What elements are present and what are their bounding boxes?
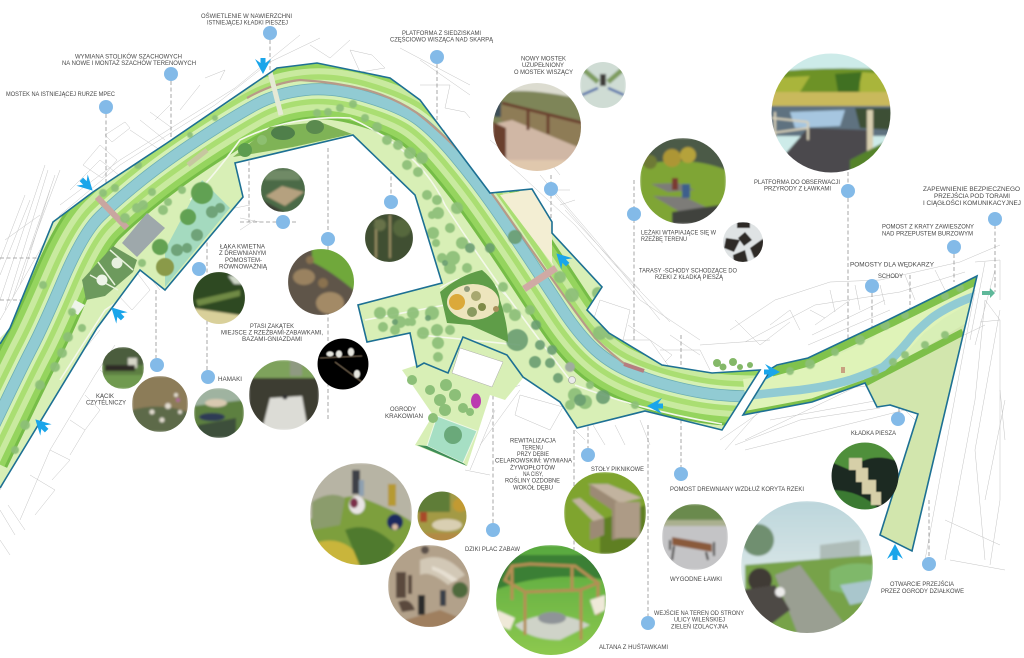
label: flower meadow bbox=[219, 244, 268, 270]
label: flower meadow: POMOSTEM- bbox=[225, 257, 262, 264]
photo: wild playground hill bbox=[310, 463, 412, 566]
label: observation platform bbox=[754, 179, 840, 192]
label: lighting bbox=[201, 11, 292, 26]
label: gazebo: ALTANA Z HUŚTAWKAMI bbox=[599, 642, 668, 651]
site area base bbox=[0, 64, 976, 550]
label: oak revitalisation: ŻYWOPŁOTÓW bbox=[510, 462, 556, 471]
photo: wicker nest bbox=[249, 360, 319, 430]
label: bird corner: PTASI ZAKĄTEK bbox=[250, 323, 295, 330]
label: reading corner: CZYTELNICZY bbox=[86, 400, 127, 406]
white paths bbox=[60, 118, 722, 424]
label: reading corner: KĄCIK bbox=[96, 393, 115, 400]
label: flower meadow: Z DREWNIANYM bbox=[219, 250, 266, 257]
label: oak revitalisation: PRZY DĘBIE bbox=[517, 451, 549, 458]
label: safe crossing bbox=[923, 186, 1021, 207]
photo: riverside visualisation bbox=[741, 501, 873, 640]
label: safe crossing: ZAPEWNIENIE BEZPIECZNEGO bbox=[923, 186, 1020, 193]
label: oak revitalisation: NA CISY, bbox=[523, 471, 543, 478]
label: chess tables: WYMIANA STOLIKÓW SZACHOWYCH bbox=[75, 52, 182, 60]
label: new footbridge: NOWY MOSTEK bbox=[521, 56, 567, 63]
small trees outside site bbox=[713, 358, 753, 370]
krakowian gardens bbox=[402, 337, 523, 466]
label: lighting: OŚWIETLENIE W NAWIERZCHNI bbox=[201, 11, 292, 20]
photo: wooden bridge bbox=[493, 83, 581, 171]
label: hammocks: HAMAKI bbox=[218, 376, 242, 383]
icon: pink oak bbox=[471, 394, 481, 408]
label: bird corner: BAZAMI-GNIAZDAMI bbox=[242, 336, 302, 343]
fountain ring bbox=[568, 376, 576, 384]
photo: forest trees bbox=[364, 213, 414, 263]
label: seating platform: PLATFORMA Z SIEDZISKAMI bbox=[402, 30, 481, 37]
label: oak revitalisation: REWITALIZACJA bbox=[510, 438, 557, 445]
label: MPEC footbridge: MOSTEK NA ISTNIEJĄCEJ RURZE MPEC bbox=[6, 91, 115, 98]
photo: hammocks bbox=[194, 388, 244, 438]
photo: wicker ducks bbox=[287, 248, 356, 316]
label: oak revitalisation: WOKÓŁ DĘBU bbox=[513, 482, 553, 491]
light green park fill bbox=[0, 119, 970, 486]
bridges bbox=[97, 197, 127, 228]
label: krakowian gardens: OGRODY bbox=[390, 406, 417, 413]
label: sunbeds: RZEŹBĘ TERENU bbox=[641, 234, 687, 243]
label: bird corner: MIEJSCE Z RZEŹBAMI-ZABAWKAMI, bbox=[221, 328, 323, 336]
label: observation platform: PRZYRODY Z ŁAWKAMI bbox=[764, 186, 831, 192]
wooden walkway along river bbox=[247, 80, 629, 367]
label: reading corner bbox=[86, 393, 127, 406]
label: krakowian gardens: KRAKOWIAN bbox=[385, 413, 423, 420]
label: terraces: TARASY -SCHODY SCHODZĄCE DO bbox=[639, 268, 737, 275]
label: oak revitalisation bbox=[495, 438, 573, 491]
label: stairs: SCHODY bbox=[878, 273, 904, 280]
label: observation platform: PLATFORMA DO OBSERWACJI bbox=[754, 179, 840, 186]
green river banks bbox=[0, 80, 775, 455]
photo: swing gazebo bbox=[495, 545, 607, 657]
label: allotment passage bbox=[881, 579, 965, 595]
photo: reading corner bbox=[102, 347, 144, 389]
label: wooden pier: POMOST DREWNIANY WZDŁUŻ KORYTA RZEKI bbox=[670, 484, 804, 493]
photo: stepping stones bbox=[831, 442, 899, 510]
label: oak revitalisation: ROŚLINY OZDOBNE bbox=[505, 476, 561, 485]
photo: observation platform bbox=[770, 52, 892, 175]
photo: comfortable bench bbox=[662, 504, 728, 570]
lower-left activity area bbox=[70, 246, 137, 315]
cream patch bbox=[500, 189, 555, 268]
label: terraces bbox=[639, 268, 737, 281]
label: grate pier bbox=[882, 224, 975, 238]
photo: river terrace steps bbox=[723, 222, 763, 262]
label: seating platform: CZĘŚCIOWO WISZĄCA NAD SKARPĄ bbox=[390, 34, 494, 44]
label: lighting: ISTNIEJĄCEJ KŁADKI PIESZEJ bbox=[207, 20, 288, 26]
label: safe crossing: PRZEJŚCIA POD TORAMI bbox=[934, 191, 1010, 200]
eastern river bank strips bbox=[743, 280, 977, 415]
label: benches: WYGODNE ŁAWKI bbox=[670, 576, 722, 583]
photo: flower meadow boardwalk bbox=[192, 271, 246, 326]
label: new footbridge: UZUPEŁNIONY bbox=[522, 62, 565, 69]
label: bird corner bbox=[221, 323, 323, 343]
label: chess tables bbox=[62, 52, 196, 67]
cadastral base map lines bbox=[0, 35, 1005, 570]
label: footbridge: KŁADKA PIESZA bbox=[851, 430, 897, 437]
photo: flowering grasses bbox=[132, 376, 188, 432]
label: grate pier: NAD PRZEPUSTEM BURZOWYM bbox=[882, 230, 973, 238]
label: new footbridge: O MOSTEK WISZĄCY bbox=[514, 69, 574, 76]
label: entrance: ZIELEŃ IZOLACYJNA bbox=[671, 622, 729, 630]
label: flower meadow: RÓWNOWAŻNIĄ bbox=[219, 262, 268, 270]
label: entrance: ULICY WILEŃSKIEJ bbox=[674, 614, 725, 624]
label: allotment passage: PRZEZ OGRODY DZIAŁKOWE bbox=[881, 588, 965, 595]
photo: suspension footbridge bbox=[580, 60, 626, 110]
label: oak revitalisation: TERENU bbox=[522, 444, 543, 451]
label: entrance bbox=[654, 608, 745, 630]
label: picnic tables: STOŁY PIKNIKOWE bbox=[591, 466, 645, 473]
dark garden strip bbox=[233, 120, 352, 157]
label: sunbeds: LEŻAKI WTAPIAJĄCE SIĘ W bbox=[641, 228, 717, 236]
project boundary bbox=[0, 63, 977, 551]
label: allotment passage: OTWARCIE PRZEJŚCIA bbox=[890, 579, 955, 588]
label: flower meadow: ŁĄKA KWIETNA bbox=[220, 244, 266, 250]
label: sunbeds bbox=[641, 228, 717, 243]
label: krakowian gardens bbox=[385, 406, 423, 420]
label: seating platform bbox=[390, 30, 494, 44]
photo: sunbeds in terrain bbox=[640, 138, 726, 224]
label: entrance: WEJŚCIE NA TEREN OD STRONY bbox=[654, 608, 745, 617]
label: chess tables: NA NOWE I MONTAŻ SZACHÓW TERENOWYCH bbox=[62, 58, 196, 67]
entrance arrows bbox=[30, 58, 903, 560]
label: wild playground: DZIKI PLAC ZABAW bbox=[465, 546, 521, 553]
label: angler piers: POMOSTY DLA WĘDKARZY bbox=[850, 261, 935, 268]
trees bbox=[11, 100, 964, 454]
photo: play area from above bbox=[388, 545, 470, 628]
sensory garden bbox=[165, 180, 230, 287]
label: new footbridge bbox=[514, 56, 574, 76]
river channel bbox=[0, 89, 775, 455]
photo: birds on branch bbox=[317, 338, 369, 390]
paved grey square bbox=[122, 213, 165, 257]
icon: small green arrow at rail passage bbox=[982, 288, 995, 298]
triangle field bbox=[868, 324, 964, 550]
photo: wooden deck in forest bbox=[260, 167, 306, 213]
label: oak revitalisation: CELAROWSKIM: WYMIANA bbox=[495, 458, 573, 465]
photo: play sculpture bbox=[418, 492, 466, 540]
photo: picnic tables bbox=[564, 472, 646, 554]
label: safe crossing: I CIĄGŁOŚCI KOMUNIKACYJNEJ bbox=[923, 198, 1021, 207]
playground bbox=[440, 270, 508, 342]
label: terraces: RZEKI Z KŁADKĄ PIESZĄ bbox=[655, 274, 724, 281]
label: grate pier: POMOST Z KRATY ZAWIESZONY bbox=[882, 224, 975, 231]
teal plaza bbox=[427, 416, 477, 463]
